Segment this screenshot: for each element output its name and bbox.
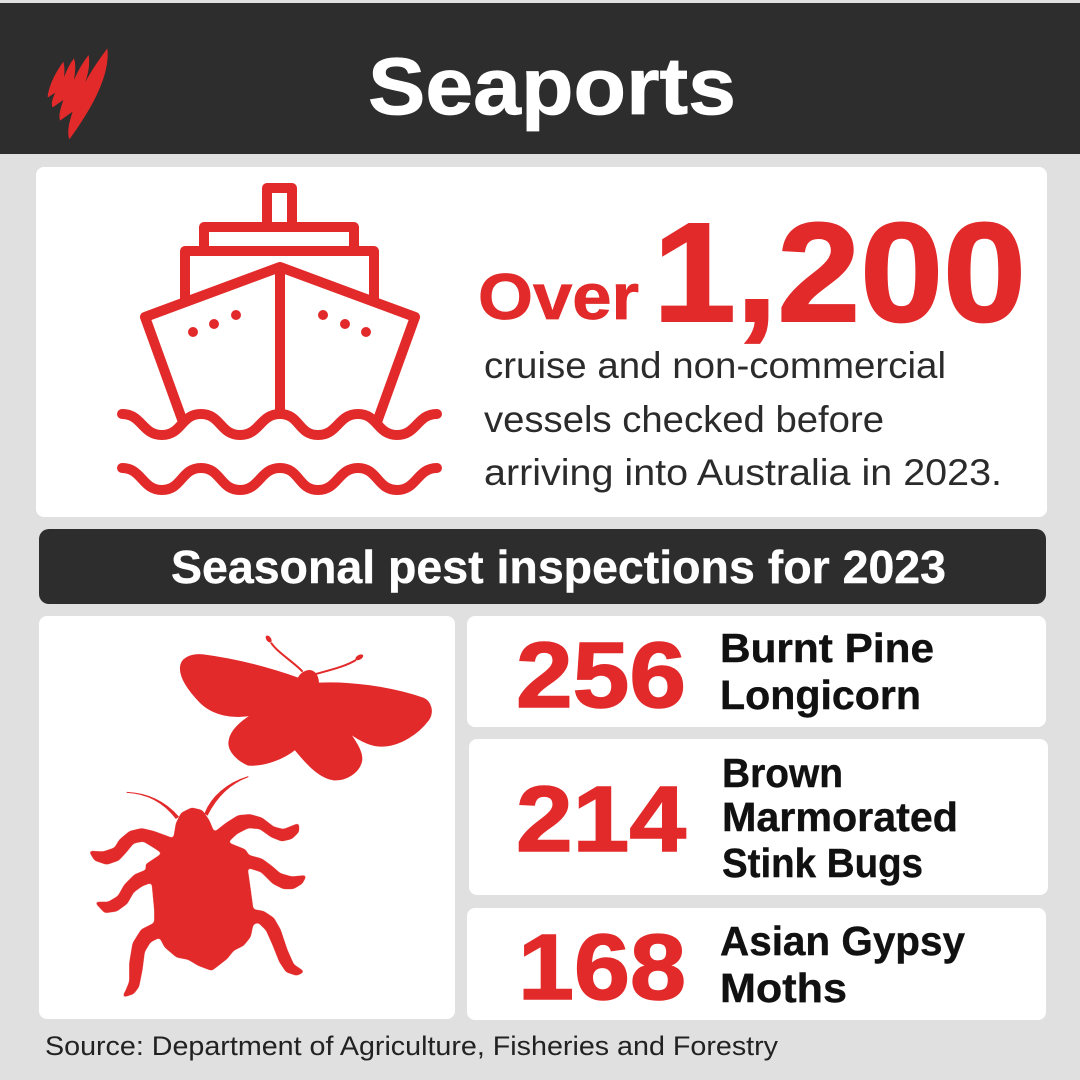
panel: Brown Marmorated Stink Bugs count: Stink Bugs bbox=[722, 840, 923, 886]
panel: Brown Marmorated Stink Bugs count: 214 bbox=[516, 767, 686, 871]
description text bbox=[484, 345, 1002, 493]
title: Seaports bbox=[368, 42, 736, 132]
panel: Burnt Pine Longicorn count: Longicorn bbox=[720, 672, 921, 718]
panel: vessels checked bbox=[36, 167, 1047, 517]
source note: Source: Department of Agriculture, Fisheries and Forestry bbox=[45, 1031, 779, 1061]
icon: cruise ship on waves bbox=[122, 188, 437, 490]
header band bbox=[0, 3, 1080, 154]
panel: pest silhouettes bbox=[39, 616, 455, 1019]
panel: Brown Marmorated Stink Bugs count bbox=[469, 739, 1048, 895]
panel: Asian Gypsy Moths count: Asian Gypsy bbox=[720, 918, 965, 964]
panel: Burnt Pine Longicorn count: Burnt Pine bbox=[720, 625, 934, 671]
big number callout bbox=[478, 193, 1026, 351]
section heading bar: Seasonal pest inspections for 2023 bbox=[171, 541, 946, 593]
panel: Asian Gypsy Moths count: 168 bbox=[518, 915, 686, 1019]
panel: Asian Gypsy Moths count bbox=[467, 908, 1046, 1020]
description text: arriving into Australia in 2023. bbox=[484, 452, 1002, 493]
panel: Brown Marmorated Stink Bugs count: Marmorated bbox=[722, 794, 958, 840]
description text: vessels checked before bbox=[484, 399, 884, 440]
description text: cruise and non-commercial bbox=[484, 345, 946, 386]
big number callout: Over bbox=[478, 260, 639, 333]
panel: Asian Gypsy Moths count: Moths bbox=[720, 965, 847, 1011]
icon: moth bbox=[181, 634, 431, 780]
panel: Burnt Pine Longicorn count bbox=[467, 616, 1046, 727]
icon: broadcaster logo bbox=[48, 48, 108, 139]
panel: Brown Marmorated Stink Bugs count: Brown bbox=[722, 750, 843, 796]
panel: Burnt Pine Longicorn count: 256 bbox=[516, 623, 686, 727]
section heading bar bbox=[39, 529, 1046, 604]
big number callout: 1,200 bbox=[653, 193, 1026, 351]
icon: stink bug bbox=[90, 777, 306, 997]
